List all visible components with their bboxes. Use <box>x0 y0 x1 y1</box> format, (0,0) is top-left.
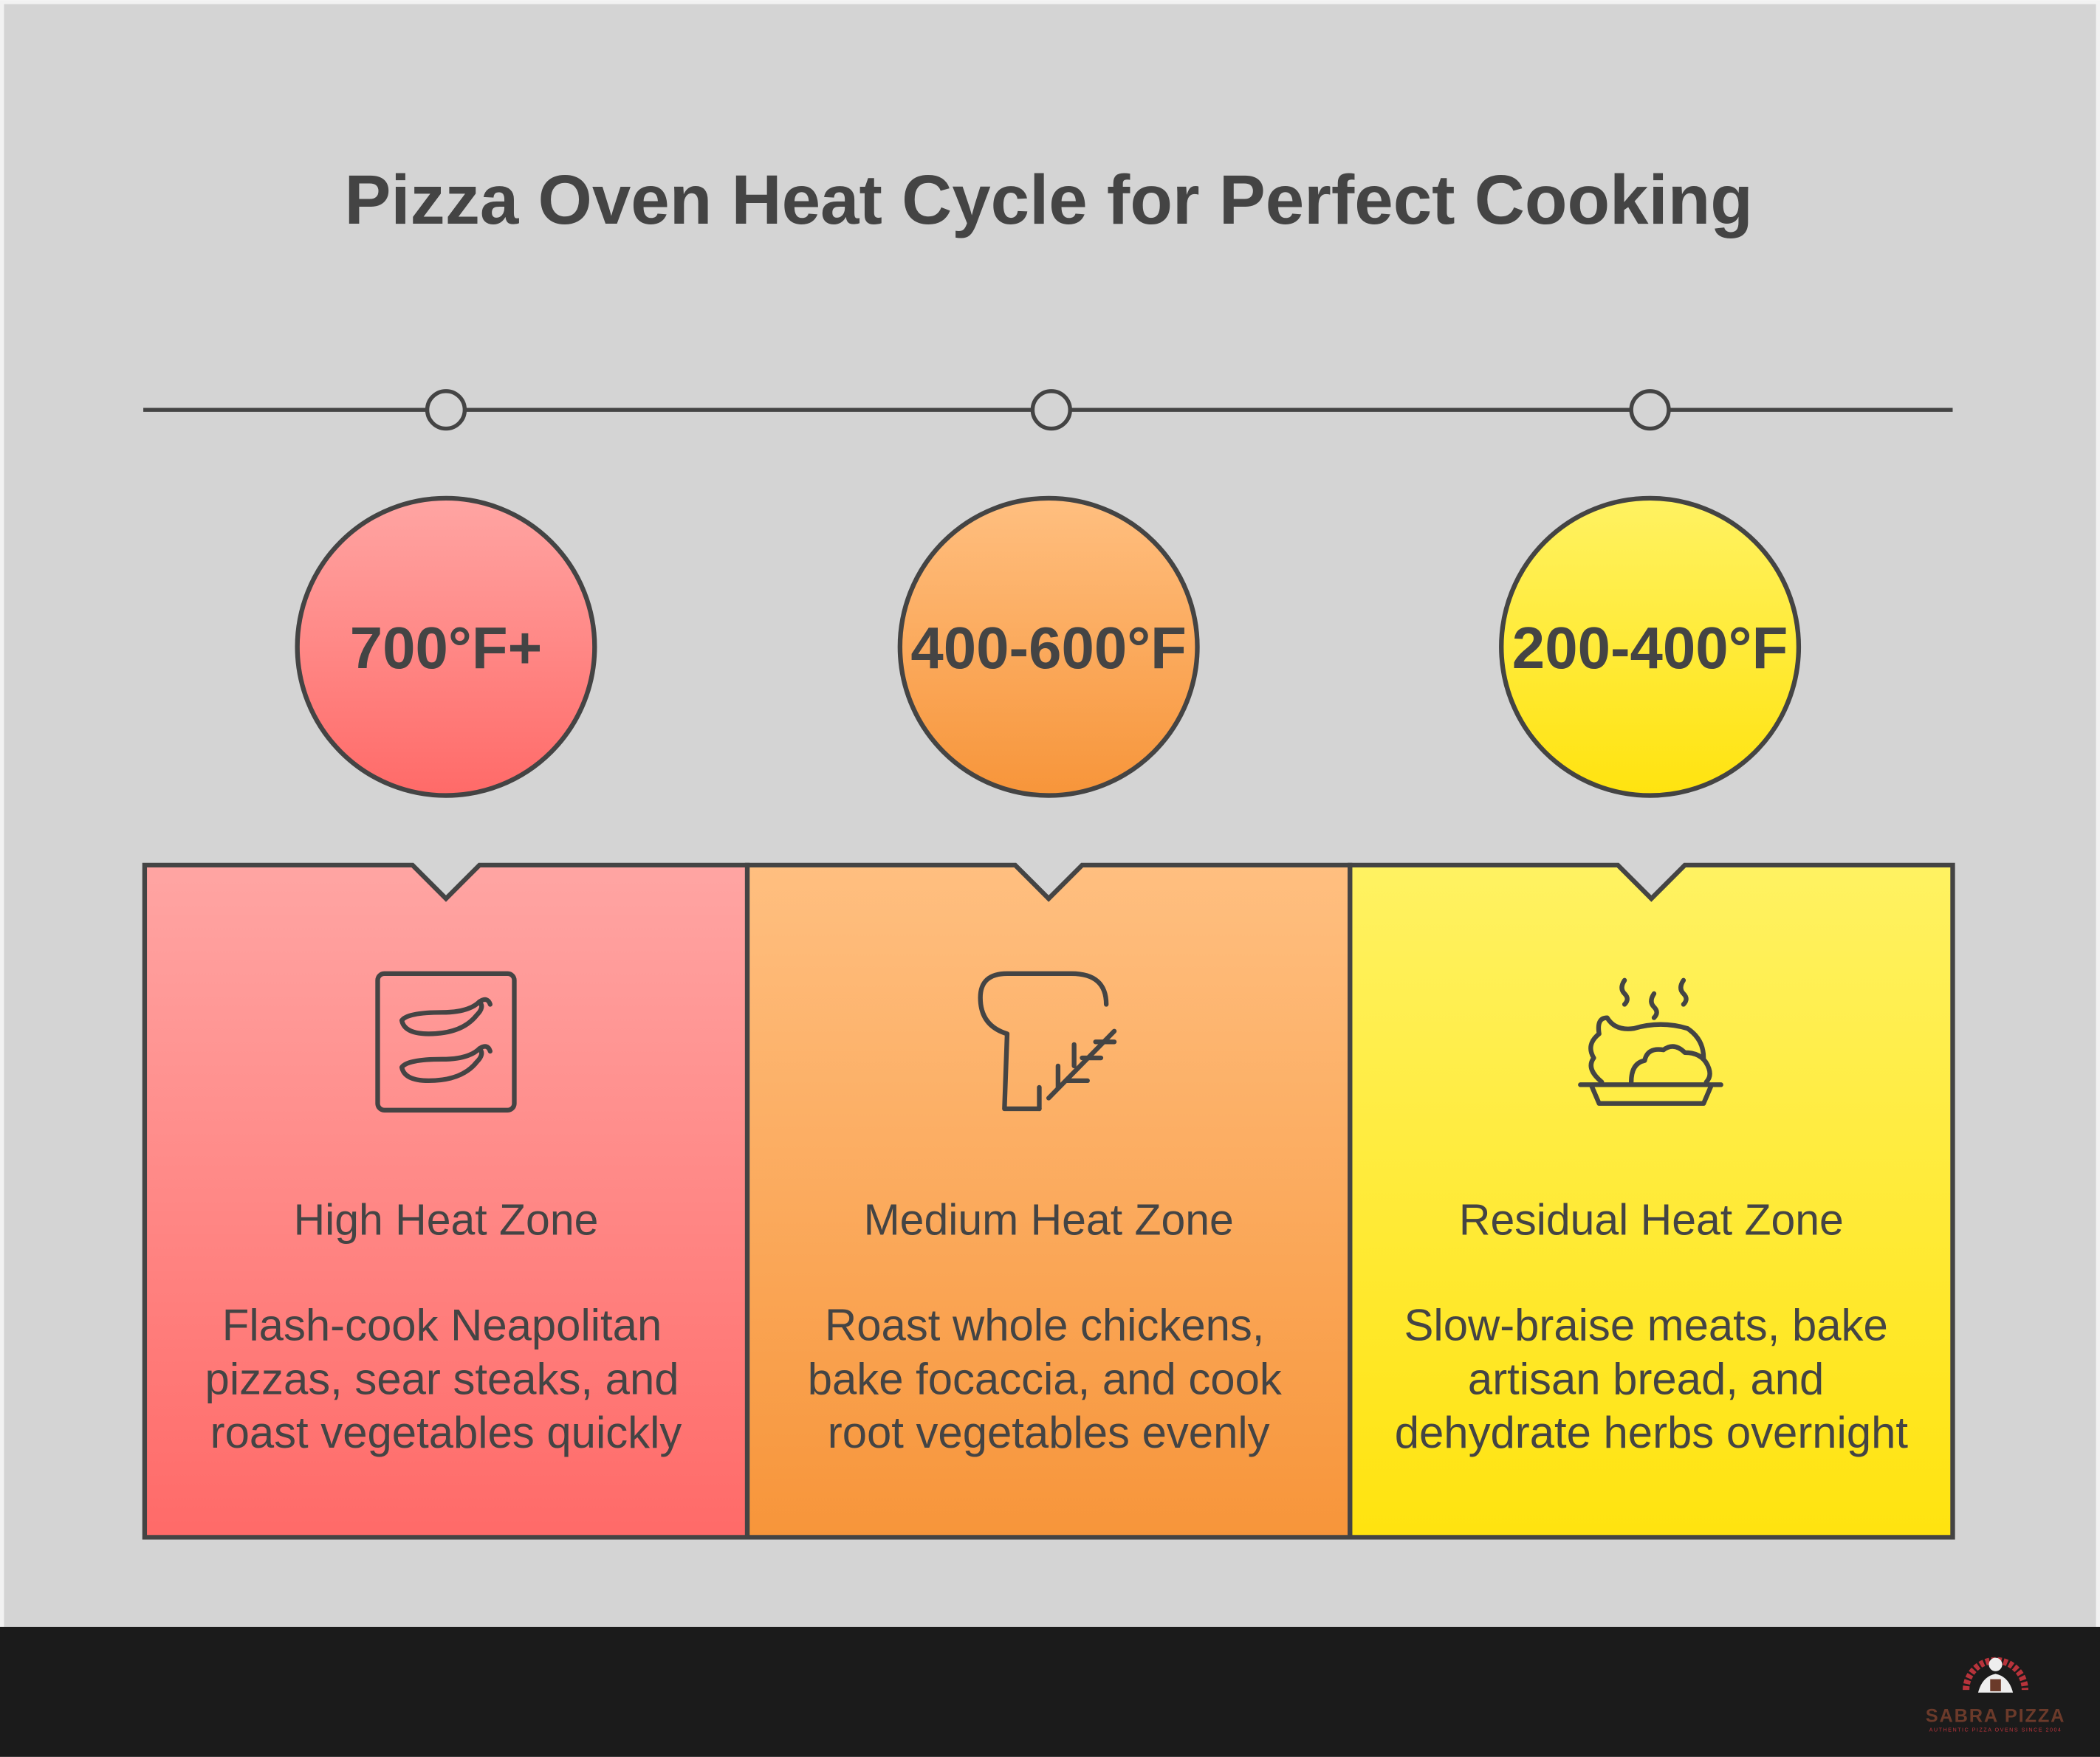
panel: high heat <box>145 865 747 1537</box>
timeline <box>143 391 1952 429</box>
logo: Sabra Pizza <box>1926 1658 2065 1733</box>
panel: residual heat: artisan bread, and <box>1468 1354 1824 1403</box>
panel: medium heat: root vegetables evenly <box>828 1408 1270 1457</box>
icon: roast chicken with steam <box>1580 980 1721 1104</box>
panel: residual heat: dehydrate herbs overnight <box>1395 1408 1908 1457</box>
panel: residual heat: Residual Heat Zone <box>1459 1196 1844 1244</box>
panel: residual heat <box>1350 865 1952 1537</box>
panel: high heat: High Heat Zone <box>294 1196 598 1244</box>
icon: chili peppers <box>377 974 514 1110</box>
panel: medium heat <box>747 865 1350 1537</box>
panel: medium heat: Medium Heat Zone <box>864 1196 1234 1244</box>
circle: 400-600F <box>900 498 1198 796</box>
circle: 200-400F <box>1501 498 1799 796</box>
panel: high heat: pizzas, sear steaks, and <box>205 1354 679 1403</box>
circle: 200-400F: 200-400°F <box>1512 615 1788 681</box>
circle: 700F: 700°F+ <box>350 615 542 681</box>
circle: 700F <box>298 498 594 796</box>
panel: high heat: roast vegetables quickly <box>210 1408 682 1457</box>
circle: 400-600F: 400-600°F <box>910 615 1187 681</box>
logo: Sabra Pizza: SABRA PIZZA <box>1926 1706 2065 1727</box>
logo: Sabra Pizza: AUTHENTIC PIZZA OVENS SINCE 2004 <box>1929 1726 2062 1733</box>
panel: medium heat: bake focaccia, and cook <box>808 1354 1283 1403</box>
panel: residual heat: Slow-braise meats, bake <box>1404 1301 1888 1350</box>
footer <box>0 1627 2100 1757</box>
panel: high heat: Flash-cook Neapolitan <box>222 1301 662 1350</box>
icon: bread and rosemary <box>981 974 1114 1109</box>
panel: medium heat: Roast whole chickens, <box>825 1301 1264 1350</box>
title: Pizza Oven Heat Cycle for Perfect Cooking <box>344 161 1753 238</box>
